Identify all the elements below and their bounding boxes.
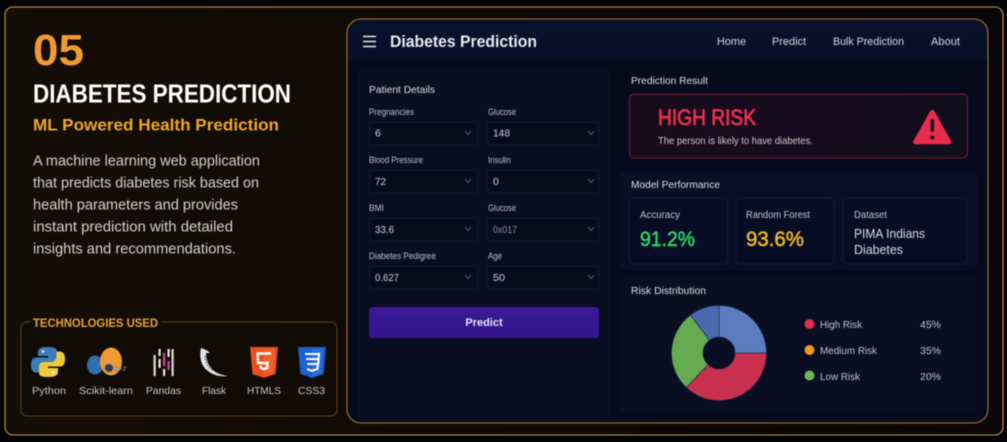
icon: menu [363, 36, 376, 46]
app title: Diabetes Prediction [390, 32, 537, 51]
icon: css3 [298, 347, 326, 397]
section number: 05 [33, 26, 84, 75]
legend: high risk: High Risk [820, 319, 863, 331]
metric: accuracy: Accuracy [640, 210, 680, 221]
metric: accuracy: 91.2% [640, 228, 695, 251]
field: glucose: Glucose [488, 107, 516, 117]
legend: low risk [804, 370, 941, 383]
metric: random forest [736, 198, 834, 264]
legend: high risk: 45% [920, 319, 941, 331]
icon: pandas: Pandas [146, 385, 181, 397]
field: glucose repeat: Glucose [488, 203, 516, 213]
description: insights and recommendations. [33, 242, 236, 258]
field: glucose repeat: 0x017 [493, 224, 517, 236]
panel: app window [347, 19, 988, 423]
icon: html5: HTMLS [247, 385, 281, 397]
metric: random forest: 93.6% [746, 228, 804, 251]
field: insulin: 0 [493, 176, 499, 188]
metric: accuracy [630, 198, 728, 264]
heading: DIABETES PREDICTION [33, 80, 291, 108]
legend [804, 319, 941, 383]
metric: dataset: Dataset [854, 210, 887, 221]
panel: patient details form [358, 69, 610, 422]
donut chart [671, 306, 766, 401]
navigation links: Predict [772, 36, 806, 48]
legend: low risk: 20% [920, 371, 941, 383]
navigation links: Bulk Prediction [833, 36, 904, 48]
icon: flask: Flask [202, 385, 227, 397]
performance heading: Model Performance [631, 179, 720, 191]
navigation links: Home [717, 36, 746, 48]
panel: risk distribution [620, 277, 977, 415]
field: age: Age [488, 251, 502, 261]
field: diabetes pedigree [369, 251, 478, 289]
navigation links: About [931, 36, 960, 48]
subtitle: ML Powered Health Prediction [33, 116, 279, 134]
predict button: Predict [465, 317, 503, 329]
panel: technologies used [21, 316, 337, 416]
field: bmi: 33.6 [375, 224, 394, 236]
panel: model performance [620, 171, 977, 270]
field: age: 50 [493, 272, 505, 284]
field: insulin [488, 155, 598, 193]
icon: pandas [146, 349, 181, 397]
metric: dataset [843, 198, 967, 264]
icon: css3: CSS3 [298, 385, 325, 397]
legend: medium risk [804, 345, 941, 357]
icon: flask [200, 348, 228, 397]
panel: project introduction [33, 26, 291, 258]
field: pregnancies [369, 107, 478, 145]
icon: python: Python [32, 385, 66, 397]
description: that predicts diabetes risk based on [33, 176, 259, 192]
description [33, 154, 260, 258]
field: diabetes pedigree: Diabetes Pedigree [369, 251, 436, 261]
icon: scikit-learn [79, 348, 133, 397]
field: diabetes pedigree: 0.627 [375, 272, 399, 284]
metric: dataset: PIMA Indians [854, 227, 925, 241]
legend: medium risk: 35% [920, 345, 941, 357]
legend: low risk: Low Risk [820, 371, 861, 383]
high risk alert: HIGH RISK [658, 105, 756, 130]
description: A machine learning web application [33, 154, 260, 170]
high risk alert [630, 94, 968, 158]
icon: scikit-learn: O˄7 [114, 366, 127, 373]
technologies heading: TECHNOLOGIES USED [33, 316, 158, 330]
field: glucose repeat [488, 203, 598, 241]
high risk alert: The person is likely to have diabetes. [658, 136, 813, 147]
icon: scikit-learn: Scikit-learn [79, 385, 133, 397]
field: blood pressure [369, 155, 478, 193]
distribution heading: Risk Distribution [631, 285, 706, 297]
predict button [369, 307, 599, 338]
icon: python [31, 347, 66, 397]
field: pregnancies: Pregnancies [369, 107, 414, 117]
navigation links [717, 36, 960, 48]
description: instant prediction with detailed [33, 220, 233, 236]
metric: random forest: Random Forest [746, 210, 810, 221]
field: pregnancies: 6 [375, 128, 381, 140]
description: health parameters and provides [33, 198, 238, 214]
field: age [488, 251, 598, 289]
form heading: Patient Details [369, 84, 435, 96]
field: glucose: 148 [493, 128, 510, 140]
icon: html5 [247, 347, 281, 397]
field: insulin: Insulin [488, 155, 511, 165]
legend: high risk [804, 319, 941, 331]
metric: dataset: Diabetes [854, 243, 903, 257]
field: bmi [369, 203, 478, 241]
field: blood pressure: 72 [375, 176, 386, 188]
navigation bar [347, 19, 988, 59]
field: glucose [488, 107, 598, 145]
panel: prediction result [630, 75, 968, 158]
field: blood pressure: Blood Pressure [369, 155, 423, 165]
legend: medium risk: Medium Risk [820, 345, 878, 357]
field: bmi: BMI [369, 203, 384, 213]
result heading: Prediction Result [631, 75, 708, 87]
icon: warning triangle [916, 112, 949, 142]
